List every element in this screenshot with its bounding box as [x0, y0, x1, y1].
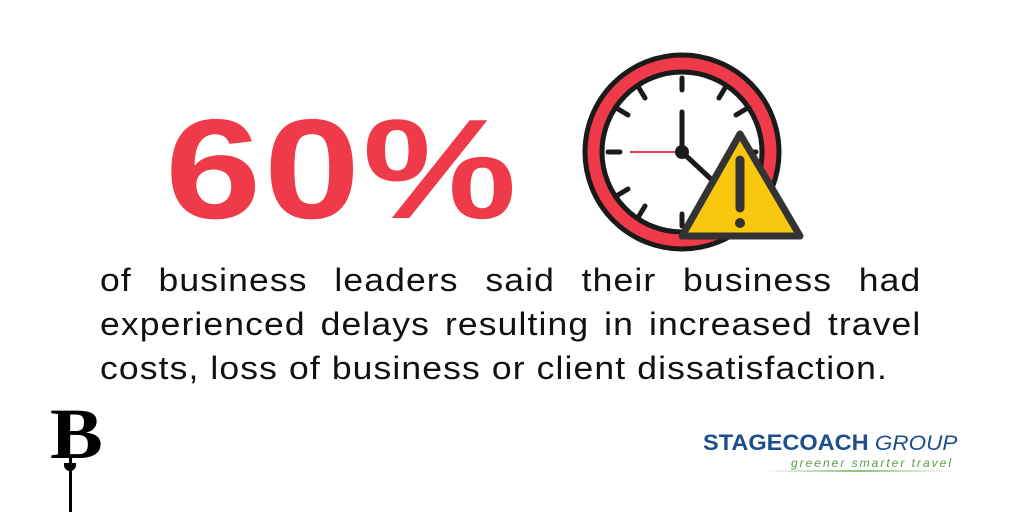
logo: Stagecoach Group: STAGECOACH GROUP — [703, 430, 957, 455]
logo: B plant: B — [50, 394, 103, 474]
body text: costs, loss of business or client dissatisfaction. — [100, 350, 888, 386]
logo: Stagecoach Group: greener smarter travel — [791, 456, 953, 470]
body text — [100, 262, 921, 386]
body text: experienced delays resulting in increased travel — [100, 306, 921, 342]
headline: 60%: 60% — [165, 90, 519, 249]
body text: of business leaders said their business had — [100, 262, 921, 298]
logo: B plant — [50, 394, 103, 512]
icon: clock with warning — [582, 52, 804, 252]
logo: Stagecoach Group — [703, 430, 958, 472]
